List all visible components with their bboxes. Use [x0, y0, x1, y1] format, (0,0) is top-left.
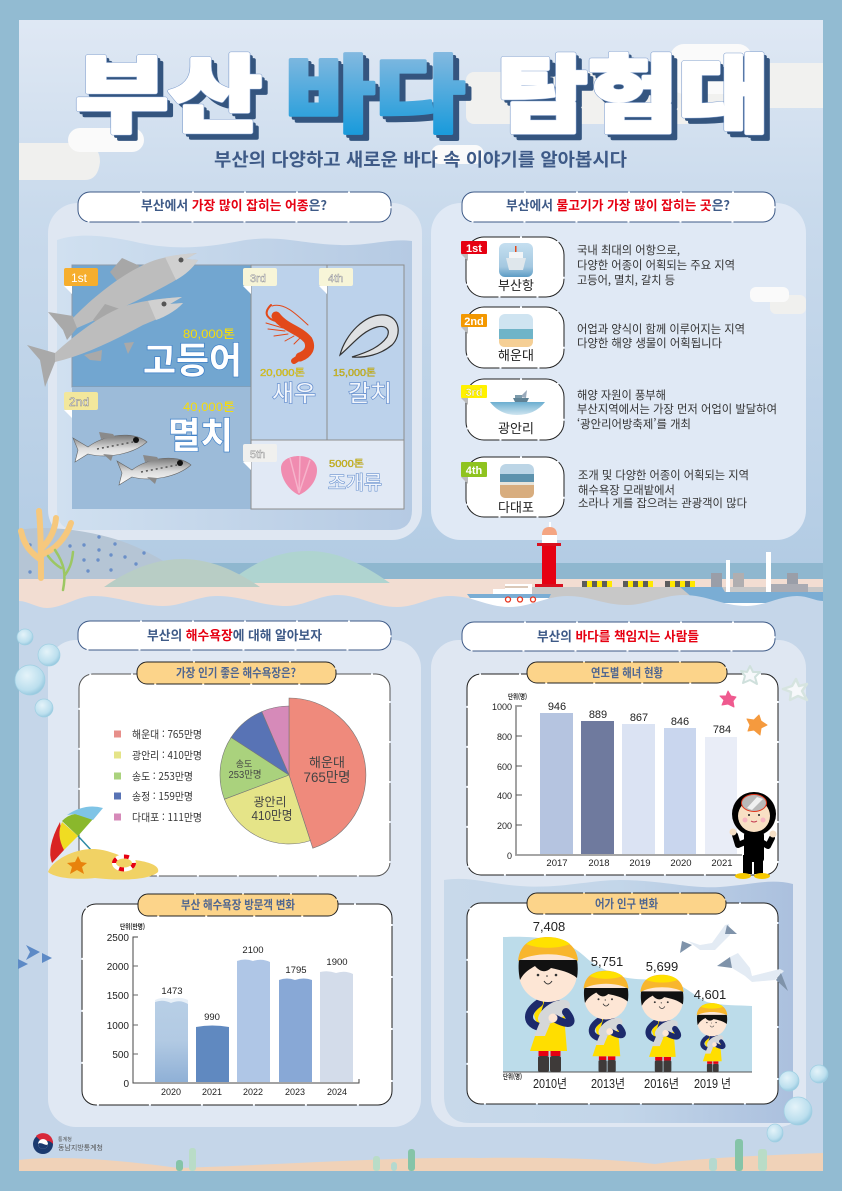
value labels	[161, 945, 348, 1023]
description: Haeundae: 다양한 해양 생물이 어획됩니다	[577, 335, 722, 351]
pier	[532, 581, 695, 606]
label: shrimp: 20,000톤	[260, 367, 305, 379]
title: 부산	[75, 49, 262, 143]
rank badge: 4th	[466, 465, 483, 477]
year labels: 2018	[588, 858, 610, 869]
title: 바다	[285, 49, 465, 143]
value labels: 1473	[161, 986, 183, 997]
title: 탐험대	[497, 49, 769, 143]
rank tag 2nd: 2nd	[69, 395, 89, 409]
boat portholes	[506, 597, 536, 602]
rank tag 4th: 4th	[328, 273, 343, 285]
legend: 광안리 : 410만명	[132, 748, 202, 763]
pie chart: 253만명	[228, 769, 262, 781]
value labels: 5,751	[591, 954, 623, 969]
card: Gwangalli: 광안리	[498, 418, 534, 437]
title: 바다	[291, 55, 471, 149]
hill: green	[104, 559, 260, 587]
icon: starfish pink	[720, 691, 736, 707]
rank badge: 3rd	[465, 387, 483, 399]
icon: shrimp	[266, 305, 310, 361]
description: Haeundae: 어업과 양식이 함께 이루어지는 지역	[577, 321, 745, 337]
pie chart: 해운대	[309, 755, 345, 770]
year labels: 2021	[711, 858, 733, 869]
description: Gwangalli: 부산지역에서는 가장 먼저 어업이 발달하여	[577, 401, 777, 417]
value labels	[548, 701, 731, 736]
year labels	[533, 1077, 731, 1091]
figure: 2013	[584, 971, 628, 1072]
description: Dadaepo: 조개 및 다양한 어종이 어획되는 지역	[578, 467, 749, 483]
rank tag 3rd: 3rd	[250, 273, 266, 285]
pill: population title: 어가 인구 변화	[595, 895, 658, 912]
description: Dadaepo: 소라나 게를 잡으려는 관광객이 많다	[578, 495, 747, 511]
label: mackerel: 80,000톤	[183, 327, 235, 341]
value labels: 846	[671, 716, 689, 728]
year labels	[161, 1087, 347, 1097]
title: 부산	[75, 49, 262, 143]
icon: starfish orange	[747, 715, 767, 735]
heading pill: top left	[78, 192, 391, 222]
description: Haeundae	[577, 321, 745, 351]
icon: beach	[499, 314, 533, 347]
label: cutlassfish	[333, 367, 392, 408]
icon: mackerel lower	[27, 297, 183, 387]
pie chart	[220, 698, 366, 848]
icon: anchovy 2	[117, 455, 191, 485]
icon: boat on water	[490, 390, 545, 415]
year labels	[546, 858, 733, 869]
axis and ticks: 200	[497, 821, 512, 831]
treemap cell: shellfish	[251, 440, 404, 509]
title: 탐험대	[500, 52, 772, 146]
title: 부산	[78, 52, 265, 146]
icon: starfish white 2	[783, 679, 807, 700]
value labels: 1795	[285, 965, 307, 976]
value labels: 2100	[242, 945, 264, 956]
rank badge: 2nd	[464, 316, 484, 328]
panel: people of the sea	[431, 640, 807, 1127]
label: shrimp: 새우	[272, 374, 316, 408]
heading pill: lower right	[462, 622, 775, 651]
label: shrimp	[260, 367, 316, 408]
value labels: 784	[713, 724, 731, 736]
year labels: 2021	[202, 1087, 222, 1097]
icon: shell	[281, 456, 317, 495]
value labels: 1900	[326, 957, 348, 968]
axis and ticks: 2000	[107, 962, 129, 973]
label: shellfish: 조개류	[328, 468, 382, 495]
card: pie chart	[79, 674, 390, 876]
legend: 송정 : 159만명	[132, 789, 193, 804]
year labels: 2016년	[644, 1077, 679, 1091]
year labels: 2010년	[533, 1077, 567, 1091]
description: Busan port	[577, 242, 735, 288]
year labels: 2019	[629, 858, 651, 869]
description: Gwangalli	[577, 387, 777, 432]
icon: cutlassfish	[340, 315, 398, 357]
rank badge: 1st	[466, 243, 482, 255]
panel: beaches	[48, 640, 421, 1127]
value labels: 7,408	[533, 919, 565, 934]
bubbles: left	[15, 629, 60, 717]
panel: top fishing grounds	[431, 203, 806, 540]
figure: 2016	[640, 975, 684, 1072]
pill: visitor chart title	[138, 894, 338, 916]
bubbles: right	[767, 1065, 828, 1142]
sea scene: horizon band	[19, 563, 823, 583]
description: Busan port: 다양한 어종이 어획되는 주요 지역	[577, 257, 735, 273]
label: mackerel: 고등어	[143, 340, 242, 381]
icon: beach umbrella and sand	[48, 807, 158, 880]
figure: 2010	[518, 937, 578, 1072]
card: Haeundae: 해운대	[498, 345, 534, 364]
label: shellfish: 5000톤	[329, 458, 364, 470]
heading pill: lower left: 부산의 해수욕장에 대해 알아보자	[147, 625, 322, 644]
icon: green seaweed	[48, 550, 73, 590]
icon: diver	[730, 792, 776, 879]
rank tag 2nd	[64, 392, 98, 418]
title: 탐험대	[497, 49, 769, 143]
card: Haeundae	[461, 307, 564, 368]
value labels: 5,699	[646, 959, 678, 974]
axis and ticks: 1000	[492, 702, 512, 712]
value labels: 946	[548, 701, 566, 713]
icon: right ship and port	[680, 552, 823, 611]
icon: sandy shore	[500, 464, 534, 498]
logo: statistics office	[33, 1133, 103, 1154]
pill: pie title	[137, 662, 336, 684]
treemap cell: cutlassfish	[327, 265, 404, 440]
year labels: 2020	[161, 1087, 181, 1097]
icon: anchovy 1	[73, 432, 147, 462]
description: Busan port: 국내 최대의 어항으로,	[577, 242, 680, 258]
heading pill: lower left	[78, 621, 391, 650]
clouds	[19, 44, 823, 180]
year labels: 2017	[546, 858, 568, 869]
figure: 2019	[697, 1003, 727, 1072]
value labels	[533, 919, 726, 1002]
pill: visitor chart title: 부산 해수욕장 방문객 변화	[181, 896, 295, 913]
logo: statistics office: 통계청	[58, 1136, 72, 1143]
logo: statistics office: 동남지방통계청	[58, 1143, 103, 1153]
heading pill: top right	[462, 192, 775, 222]
legend	[114, 727, 202, 825]
label: cutlassfish: 15,000톤	[333, 367, 376, 379]
axis and ticks	[107, 933, 359, 1090]
unit label: 단위(만명)	[120, 922, 145, 932]
pill: haenyeo chart title	[527, 662, 727, 683]
background water shape	[503, 937, 752, 1072]
unit label: 단위(명)	[503, 1072, 522, 1082]
seaweed sticks	[176, 1139, 767, 1171]
axis and ticks: 500	[112, 1050, 129, 1061]
axis and ticks: 1500	[107, 991, 129, 1002]
icon: lighthouse	[535, 522, 563, 587]
icon: orange coral	[21, 511, 71, 578]
subtitle: 부산의 다양하고 새로운 바다 속 이야기를 알아봅시다	[214, 146, 627, 172]
bars	[540, 713, 737, 854]
year labels: 2023	[285, 1087, 305, 1097]
unit label: 단위(명)	[508, 692, 527, 702]
heading pill: top left: 부산에서 가장 많이 잡히는 어종은?	[141, 195, 327, 214]
pie chart: 광안리	[253, 795, 287, 809]
title: 바다	[288, 52, 468, 146]
description: Busan port: 고등어, 멸치, 갈치 등	[577, 272, 675, 288]
icon: small boat	[467, 584, 551, 608]
treemap cell: anchovy	[72, 387, 251, 509]
small cloud	[750, 287, 806, 314]
rank tag 1st	[64, 268, 98, 294]
description: Gwangalli: 해양 자원이 풍부해	[577, 387, 666, 403]
card: haenyeo bar chart	[467, 674, 778, 875]
hill: teal	[228, 551, 390, 583]
rank tag 5th	[243, 444, 277, 470]
value labels: 990	[204, 1012, 220, 1023]
card: Dadaepo	[461, 457, 564, 517]
bars	[155, 960, 353, 1082]
rank tag 5th: 5th	[250, 449, 265, 461]
legend: 다대포 : 111만명	[132, 810, 202, 825]
description: Gwangalli: ‘광안리어방축제’를 개최	[577, 416, 691, 432]
value labels: 4,601	[694, 987, 726, 1002]
lower sea background with wave	[19, 595, 823, 1171]
axis and ticks: 2500	[107, 933, 129, 944]
pill: pie title: 가장 인기 좋은 해수욕장은?	[176, 664, 296, 681]
card: Busan port: 부산항	[498, 275, 534, 294]
pill: population title	[527, 893, 726, 914]
axis and ticks: 800	[497, 732, 512, 742]
sky and sea background	[19, 20, 823, 565]
value labels: 867	[630, 712, 648, 724]
axis and ticks: 1000	[107, 1021, 129, 1032]
axis and ticks	[492, 702, 742, 861]
inner wave area	[444, 879, 793, 1123]
legend: 해운대 : 765만명	[132, 727, 202, 742]
rank tag 4th	[319, 268, 353, 294]
icon: mackerel upper	[48, 253, 198, 340]
year labels: 2024	[327, 1087, 347, 1097]
card: visitor bar chart	[82, 904, 392, 1105]
bottom sand	[19, 1153, 823, 1171]
icon: starfish white 1	[741, 666, 760, 684]
description: Dadaepo	[578, 467, 749, 511]
year labels: 2013년	[591, 1077, 625, 1091]
card: Gwangalli	[461, 379, 564, 440]
rank tag 3rd	[243, 268, 277, 294]
axis and ticks: 0	[507, 851, 512, 861]
icon: small fish arrows	[18, 945, 52, 969]
description: Dadaepo: 해수욕장 모래밭에서	[578, 482, 675, 498]
title: 탐험대	[503, 55, 775, 149]
card: fishing population	[467, 903, 788, 1104]
pie chart: 410만명	[252, 808, 292, 823]
heading pill: top right: 부산에서 물고기가 가장 많이 잡히는 곳은?	[506, 195, 730, 214]
heading pill: lower right: 부산의 바다를 책임지는 사람들	[537, 626, 699, 645]
gull 2	[717, 953, 788, 991]
label: cutlassfish: 갈치	[348, 374, 392, 408]
panel: top fish species	[27, 203, 422, 540]
year labels: 2020	[670, 858, 692, 869]
axis and ticks: 600	[497, 762, 512, 772]
year labels: 2019 년	[694, 1077, 731, 1091]
year labels: 2022	[243, 1087, 263, 1097]
axis and ticks: 400	[497, 791, 512, 801]
rank tag 1st: 1st	[71, 271, 88, 285]
label: anchovy: 멸치	[168, 415, 233, 456]
card: Dadaepo: 다대포	[498, 497, 534, 516]
hill: grey-blue with dots	[19, 528, 195, 579]
pie chart: 765만명	[304, 769, 350, 785]
inner water area	[57, 236, 412, 530]
sand strip	[19, 579, 823, 614]
label: anchovy: 40,000톤	[183, 400, 235, 414]
treemap cell: mackerel	[72, 265, 251, 387]
title	[75, 49, 775, 149]
axis and ticks: 0	[123, 1079, 129, 1090]
title: 부산	[81, 55, 268, 149]
card: Busan port	[461, 237, 564, 297]
pill: haenyeo chart title: 연도별 해녀 현황	[591, 664, 663, 681]
treemap cell: shrimp	[251, 265, 327, 440]
value labels: 889	[589, 709, 607, 721]
pie chart: 송도	[236, 759, 252, 769]
legend: 송도 : 253만명	[132, 769, 193, 784]
icon: ship	[499, 243, 533, 277]
gull 1	[680, 924, 737, 953]
